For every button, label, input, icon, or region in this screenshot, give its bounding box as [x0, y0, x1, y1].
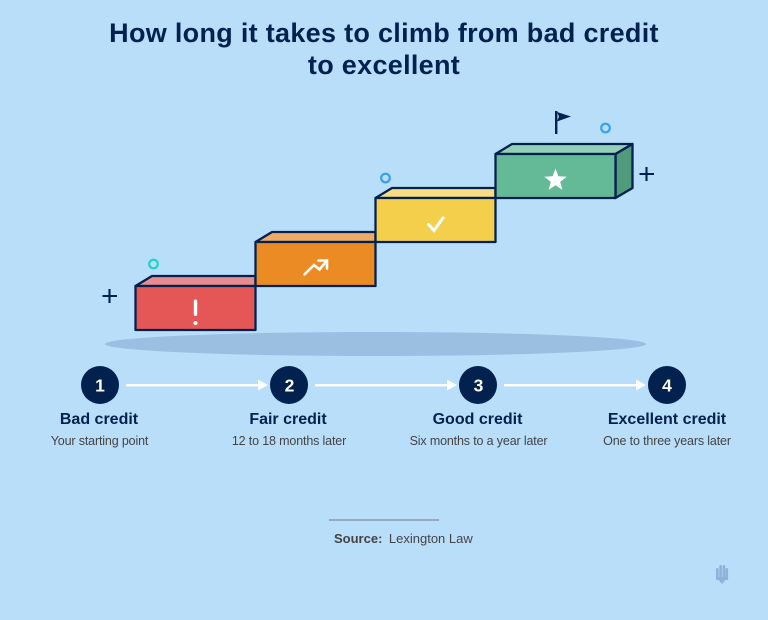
label: excellent credit: Excellent credit: [608, 411, 726, 428]
step 4: excellent credit block: [496, 144, 632, 198]
step 3: good credit block: [376, 188, 496, 242]
step number 1: 1: [95, 376, 105, 396]
decorative circle: teal: [149, 260, 158, 268]
arrow: step 2 to 3: [315, 380, 457, 390]
label: bad credit: Bad credit: [60, 411, 138, 428]
decorative plus: right: [640, 167, 654, 181]
decorative circle: blue middle: [381, 174, 390, 182]
title: [109, 18, 659, 80]
ground shadow: [105, 332, 646, 356]
caption: bad credit: Your starting point: [51, 434, 148, 448]
label: good credit: Good credit: [433, 411, 522, 428]
caption: excellent credit: One to three years later: [603, 434, 731, 448]
step number 2: [270, 366, 308, 404]
source divider: [329, 519, 439, 521]
icon: flag: [555, 111, 571, 134]
decorative plus: left: [102, 289, 117, 303]
icon: star: [544, 168, 567, 190]
caption: good credit: Six months to a year later: [410, 434, 547, 448]
arrow: step 1 to 2: [126, 380, 268, 390]
caption: fair credit: 12 to 18 months later: [232, 434, 346, 448]
step number 2: 2: [285, 376, 295, 396]
step 2: fair credit block: [256, 232, 376, 286]
step number 1: [81, 366, 119, 404]
step number 3: 3: [474, 376, 484, 396]
title: to excellent: [308, 50, 460, 80]
step number 4: [648, 366, 686, 404]
icon: watermark hand: [716, 565, 728, 584]
icon: check mark: [428, 218, 443, 230]
arrow: step 3 to 4: [504, 380, 646, 390]
decorative circle: blue top: [601, 124, 610, 132]
step number 3: [459, 366, 497, 404]
label: fair credit: Fair credit: [249, 411, 327, 428]
step 1: bad credit block: [136, 276, 256, 330]
source: Source: Lexington Law: [334, 531, 473, 546]
step number 4: 4: [662, 376, 672, 396]
icon: exclamation mark: [194, 300, 198, 325]
title: How long it takes to climb from bad credit: [109, 18, 659, 48]
icon: trending up arrow: [304, 260, 327, 274]
